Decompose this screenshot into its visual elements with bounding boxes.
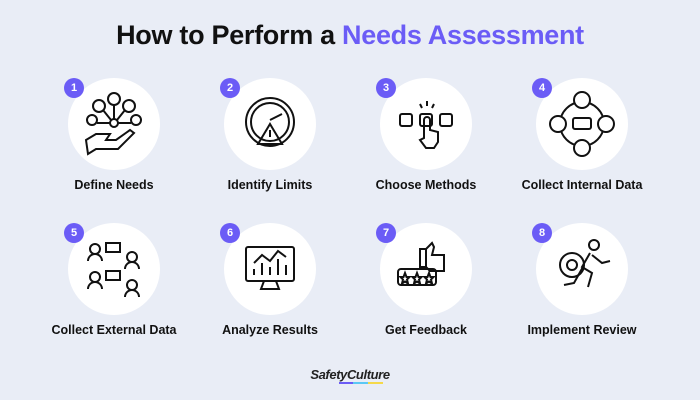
icon: monitor chart [245, 246, 295, 290]
step 4: 4 [539, 82, 545, 94]
icon: pointer buttons [399, 101, 453, 149]
icon: gauge warning [245, 97, 295, 147]
step 4 [522, 78, 643, 192]
step 8 [527, 223, 637, 337]
label: Choose Methods [376, 178, 476, 192]
label: Identify Limits [228, 178, 312, 192]
label: Collect External Data [51, 323, 177, 337]
step 5 [51, 223, 177, 337]
step 7 [376, 223, 472, 337]
step 6 [220, 223, 318, 337]
icon: running person gear [559, 239, 610, 288]
icon: external people chat [87, 242, 140, 297]
step 1 [64, 78, 160, 192]
label: Get Feedback [385, 323, 467, 337]
step 3: 3 [383, 82, 389, 94]
label: Analyze Results [222, 323, 318, 337]
step 8: 8 [539, 227, 545, 239]
title: How to Perform a Needs Assessment [116, 20, 584, 50]
step 2: 2 [227, 82, 233, 94]
step 7: 7 [383, 227, 389, 239]
label: Implement Review [527, 323, 637, 337]
step 1: 1 [71, 82, 77, 94]
label: Define Needs [74, 178, 154, 192]
step 2 [220, 78, 316, 192]
step 5: 5 [71, 227, 77, 239]
step 6: 6 [227, 227, 233, 239]
logo: SafetyCulture [310, 367, 390, 382]
icon: hand with needs [84, 92, 142, 156]
label: Collect Internal Data [522, 178, 642, 192]
step 3 [376, 78, 476, 192]
icon: thumbs up stars [397, 241, 445, 286]
icon: people network [549, 91, 615, 157]
